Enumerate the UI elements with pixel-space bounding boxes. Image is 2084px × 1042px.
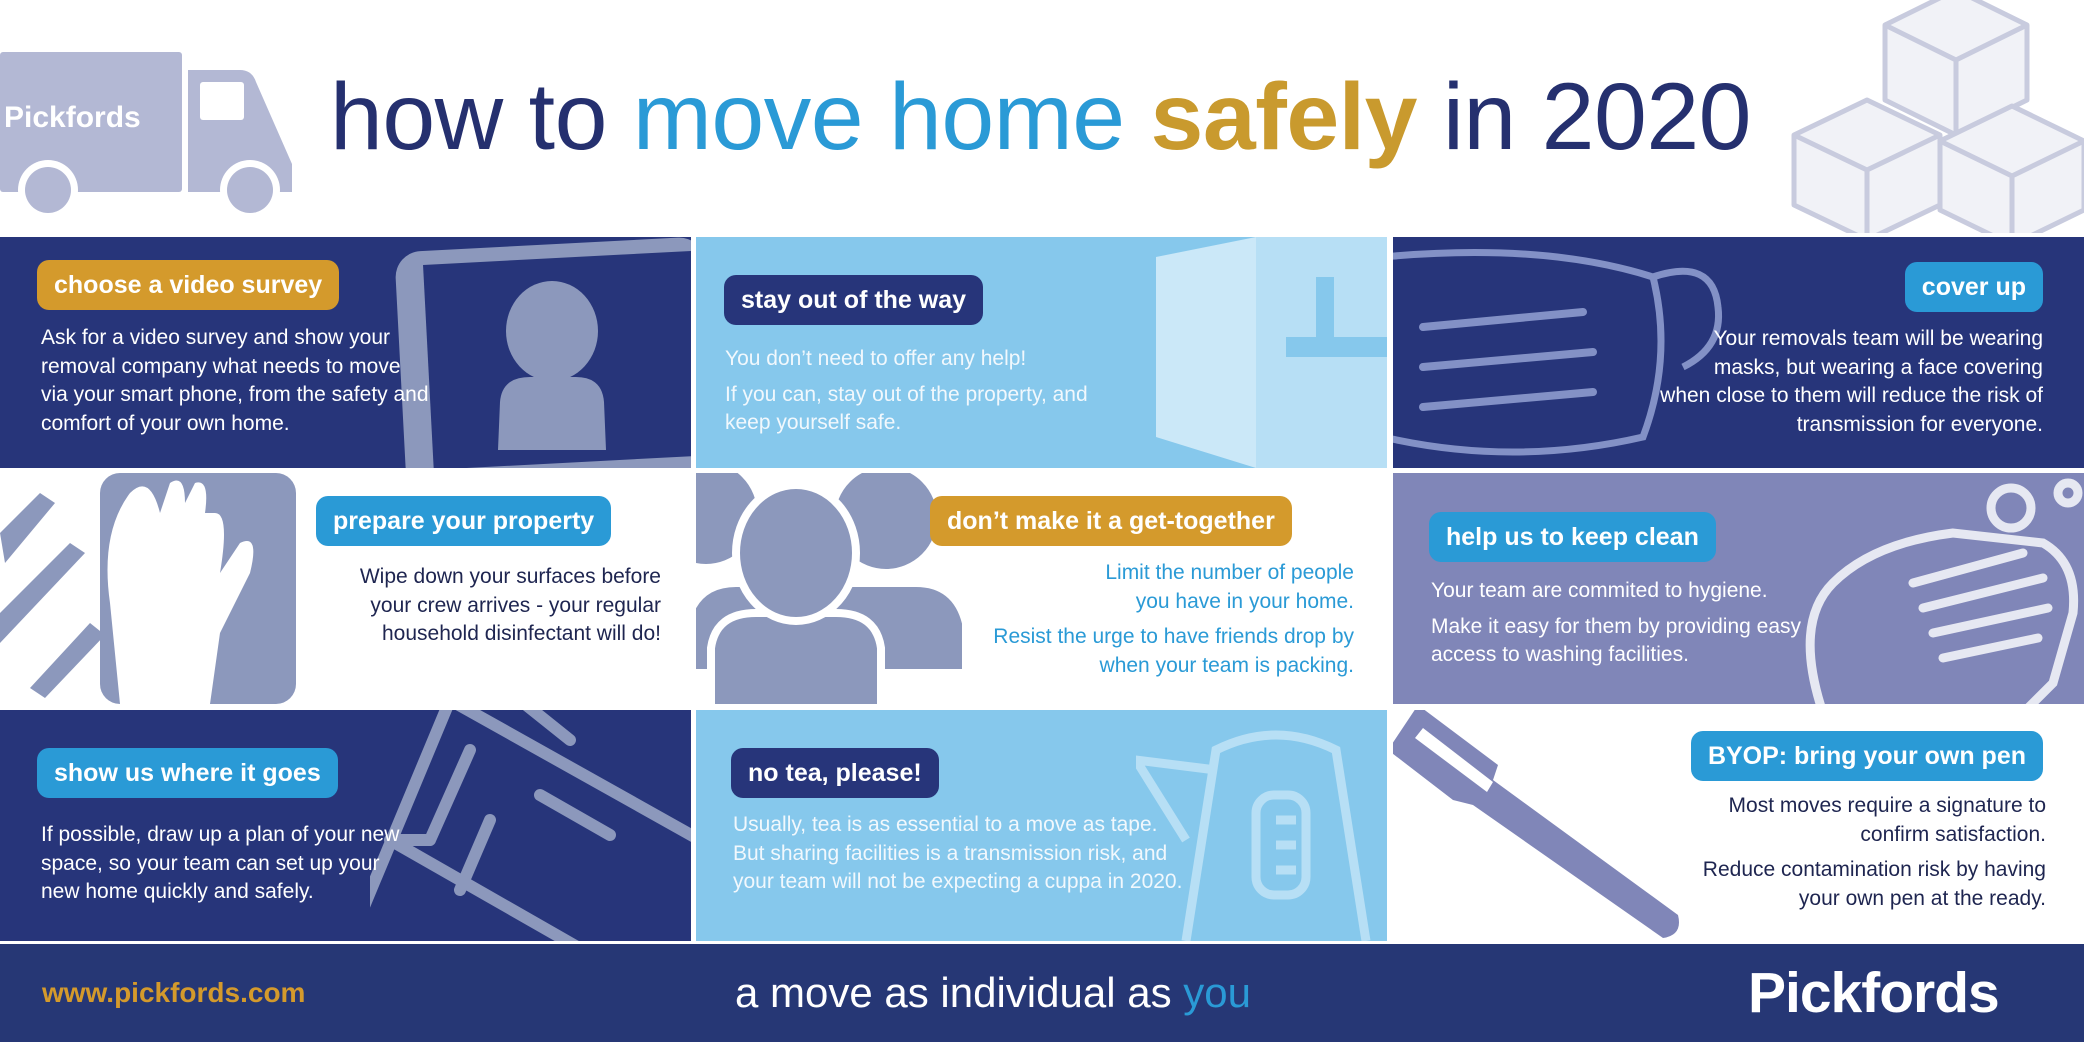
icon: floor plan bbox=[370, 710, 691, 941]
heading bbox=[1691, 731, 2043, 781]
body text: your team will not be expecting a cuppa in 2020. bbox=[733, 870, 1182, 893]
body text bbox=[360, 565, 661, 645]
panel: show us where it goes bbox=[0, 710, 691, 941]
footer bbox=[0, 944, 2084, 1042]
heading bbox=[37, 260, 339, 310]
body text: Ask for a video survey and show your bbox=[41, 326, 390, 349]
body text: space, so your team can set up your bbox=[41, 852, 380, 875]
icon: boxes bbox=[1792, 0, 2084, 233]
panel: prepare your property bbox=[0, 473, 691, 704]
icon: face mask bbox=[1393, 249, 1722, 456]
body text bbox=[41, 326, 429, 435]
footer: logo: Pickfords bbox=[1748, 961, 1999, 1025]
icon: tablet with person bbox=[396, 238, 691, 468]
heading bbox=[1429, 512, 1716, 562]
heading: show us where it goes bbox=[54, 759, 321, 787]
heading: stay out of the way bbox=[741, 286, 966, 314]
body text: when your team is packing. bbox=[1100, 654, 1354, 677]
heading: help us to keep clean bbox=[1446, 523, 1699, 551]
icon: truck bbox=[0, 52, 292, 213]
heading: BYOP: bring your own pen bbox=[1708, 742, 2026, 770]
body text: You don’t need to offer any help! If you can, stay out of the property, and bbox=[725, 347, 1088, 406]
heading bbox=[37, 748, 338, 798]
body text bbox=[993, 561, 1354, 677]
panel: don't make it a get-together bbox=[696, 473, 1387, 704]
body text bbox=[1660, 327, 2043, 436]
footer: website: www.pickfords.com bbox=[42, 977, 305, 1008]
body text: Most moves require a signature to bbox=[1729, 794, 2046, 817]
body text bbox=[41, 823, 400, 903]
body text bbox=[725, 347, 1088, 434]
body text: Your team are commited to hygiene. Make it easy for them by providing easy bbox=[1431, 579, 1801, 638]
body text: transmission for everyone. bbox=[1797, 413, 2043, 436]
body text: removal company what needs to move bbox=[41, 355, 401, 378]
body text: household disinfectant will do! bbox=[382, 622, 661, 645]
heading bbox=[316, 496, 611, 546]
body text: confirm satisfaction. Reduce contamination risk by having bbox=[1703, 823, 2046, 881]
body text: access to washing facilities. bbox=[1431, 643, 1689, 666]
heading: cover up bbox=[1922, 273, 2026, 301]
body text: If possible, draw up a plan of your new bbox=[41, 823, 399, 846]
body text: when close to them will reduce the risk of bbox=[1660, 384, 2043, 407]
body text: Wipe down your surfaces before bbox=[360, 565, 661, 588]
body text: But sharing facilities is a transmission risk, and bbox=[733, 842, 1167, 865]
body text: your own pen at the ready. bbox=[1799, 887, 2046, 910]
heading bbox=[724, 275, 983, 325]
body text: masks, but wearing a face covering bbox=[1714, 356, 2043, 379]
footer: tagline: a move as individual as you bbox=[735, 969, 1251, 1016]
icon: pen bbox=[1393, 710, 1679, 938]
panel: no tea, please bbox=[696, 710, 1387, 941]
body text bbox=[733, 813, 1182, 893]
body text: keep yourself safe. bbox=[725, 411, 901, 434]
heading: no tea, please! bbox=[748, 759, 922, 787]
body text: you have in your home. Resist the urge to have friends drop by bbox=[993, 590, 1354, 648]
heading: choose a video survey bbox=[54, 271, 322, 299]
icon: wiping hand bbox=[0, 473, 296, 704]
heading bbox=[930, 496, 1292, 546]
title: how to move home safely in 2020 bbox=[330, 64, 1751, 170]
body text bbox=[1703, 794, 2046, 910]
body text: Your removals team will be wearing bbox=[1713, 327, 2043, 350]
icon: washing hands bbox=[1806, 478, 2082, 704]
icon: door bbox=[1156, 237, 1387, 468]
panel: stay out of the way bbox=[696, 237, 1387, 468]
body text: your crew arrives - your regular bbox=[370, 594, 661, 617]
body text bbox=[1431, 579, 1801, 666]
body text: new home quickly and safely. bbox=[41, 880, 314, 903]
icon: group of people bbox=[696, 473, 962, 704]
heading bbox=[1905, 262, 2043, 312]
panel: cover up bbox=[1393, 237, 2084, 468]
body text: Limit the number of people bbox=[1105, 561, 1354, 584]
heading: prepare your property bbox=[333, 507, 594, 535]
icon: truck: Pickfords bbox=[4, 101, 141, 134]
panel: BYOP bring your own pen bbox=[1393, 710, 2084, 941]
body text: via your smart phone, from the safety and bbox=[41, 383, 429, 406]
panel: choose a video survey bbox=[0, 237, 691, 468]
heading: don’t make it a get-together bbox=[947, 507, 1275, 535]
heading bbox=[731, 748, 939, 798]
body text: Usually, tea is as essential to a move as tape. bbox=[733, 813, 1158, 836]
panel: help us to keep clean bbox=[1393, 473, 2084, 704]
icon: kettle bbox=[1136, 730, 1370, 941]
body text: comfort of your own home. bbox=[41, 412, 290, 435]
